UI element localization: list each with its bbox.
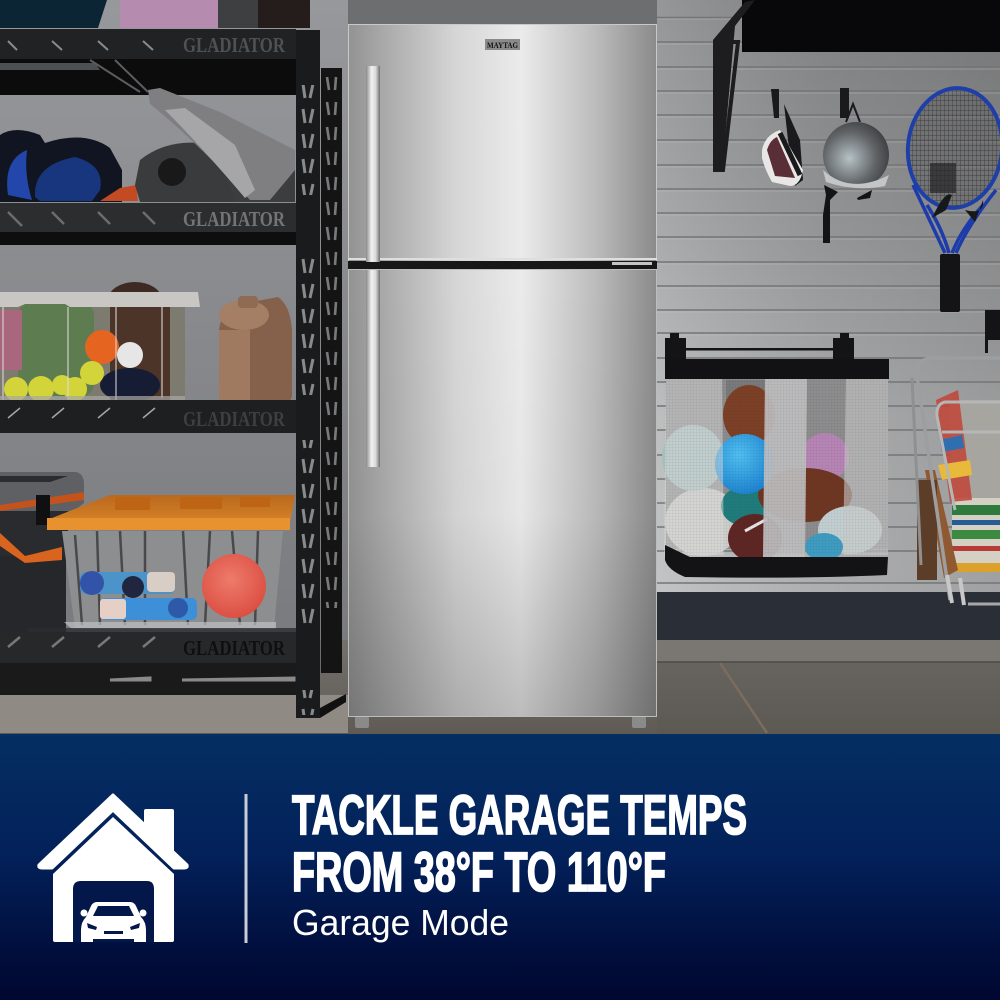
folding beach chair [912, 358, 1000, 605]
red ball [202, 554, 266, 618]
wood rail [925, 470, 958, 578]
clear bin with balls [0, 282, 200, 403]
divider [244, 794, 248, 943]
shelf 3: GLADIATOR [183, 407, 286, 431]
top door [348, 24, 657, 262]
hangers [665, 333, 854, 360]
shelf 3 [0, 400, 296, 433]
football lower [728, 514, 782, 562]
mesh bag with balls [662, 333, 889, 578]
wall shelf with bracket [713, 0, 1000, 172]
shelf 2 [0, 203, 296, 245]
dark teal ball [721, 486, 769, 526]
white soccer ball [665, 488, 741, 556]
pink ball [801, 433, 849, 481]
concrete floor [0, 640, 1000, 734]
handle lower [366, 270, 380, 467]
heading [292, 783, 747, 903]
garage photo background [0, 0, 1000, 734]
car [80, 902, 146, 942]
heading: FROM 38°F TO 110°F [292, 840, 666, 903]
blue toy blasters [80, 571, 197, 620]
sleeping bag and umbrella [0, 88, 295, 202]
chimney [144, 809, 174, 858]
shelf 1: GLADIATOR [183, 33, 286, 57]
slat wall [657, 0, 1000, 595]
cooler [0, 472, 84, 632]
orange wiffle ball [85, 330, 119, 364]
small blue ball [805, 533, 843, 561]
bottom banner [0, 734, 1000, 1000]
storage tub with orange lid [47, 495, 295, 629]
handle upper [366, 66, 380, 262]
left wall behind shelves [0, 0, 348, 640]
bag interior [666, 379, 888, 549]
mesh panels [664, 379, 888, 558]
towel stripes [936, 390, 972, 502]
blue ball [715, 434, 775, 494]
brown jug [219, 296, 292, 403]
lower door [348, 269, 657, 717]
top band [665, 359, 889, 379]
patterned ball [818, 506, 882, 554]
football [758, 468, 852, 522]
shelving unit with stored items [0, 0, 346, 718]
Maytag badge: MAYTAG [487, 40, 518, 50]
shelf 1 [0, 29, 296, 95]
teal ball [662, 425, 724, 491]
back upright [321, 68, 342, 673]
helmet [823, 88, 889, 243]
canvas [950, 400, 1000, 500]
white wiffle ball [117, 342, 143, 368]
tennis racket [902, 83, 1000, 312]
door gap [348, 258, 657, 269]
stripes [952, 498, 1000, 572]
bottom band [665, 545, 888, 578]
roof [39, 795, 187, 868]
metal frame [917, 358, 1000, 600]
refrigerator [348, 24, 657, 728]
front upright [296, 30, 346, 718]
house body [53, 817, 174, 942]
yellow tennis balls [4, 361, 104, 402]
shelf 4: GLADIATOR [183, 636, 286, 660]
icon: house with car in garage [39, 795, 187, 942]
small wall hook right [985, 310, 1000, 353]
basketball [723, 385, 775, 445]
shelf 4 [0, 628, 320, 695]
garage door opening [73, 881, 154, 942]
orange lid [47, 495, 295, 530]
top shelf items [0, 0, 310, 28]
shelf 2: GLADIATOR [183, 207, 286, 231]
subheading: Garage Mode [292, 902, 509, 943]
dark baseboard [657, 592, 1000, 640]
heading: TACKLE GARAGE TEMPS [292, 783, 747, 846]
ski goggles [762, 89, 803, 186]
feet [355, 716, 646, 728]
